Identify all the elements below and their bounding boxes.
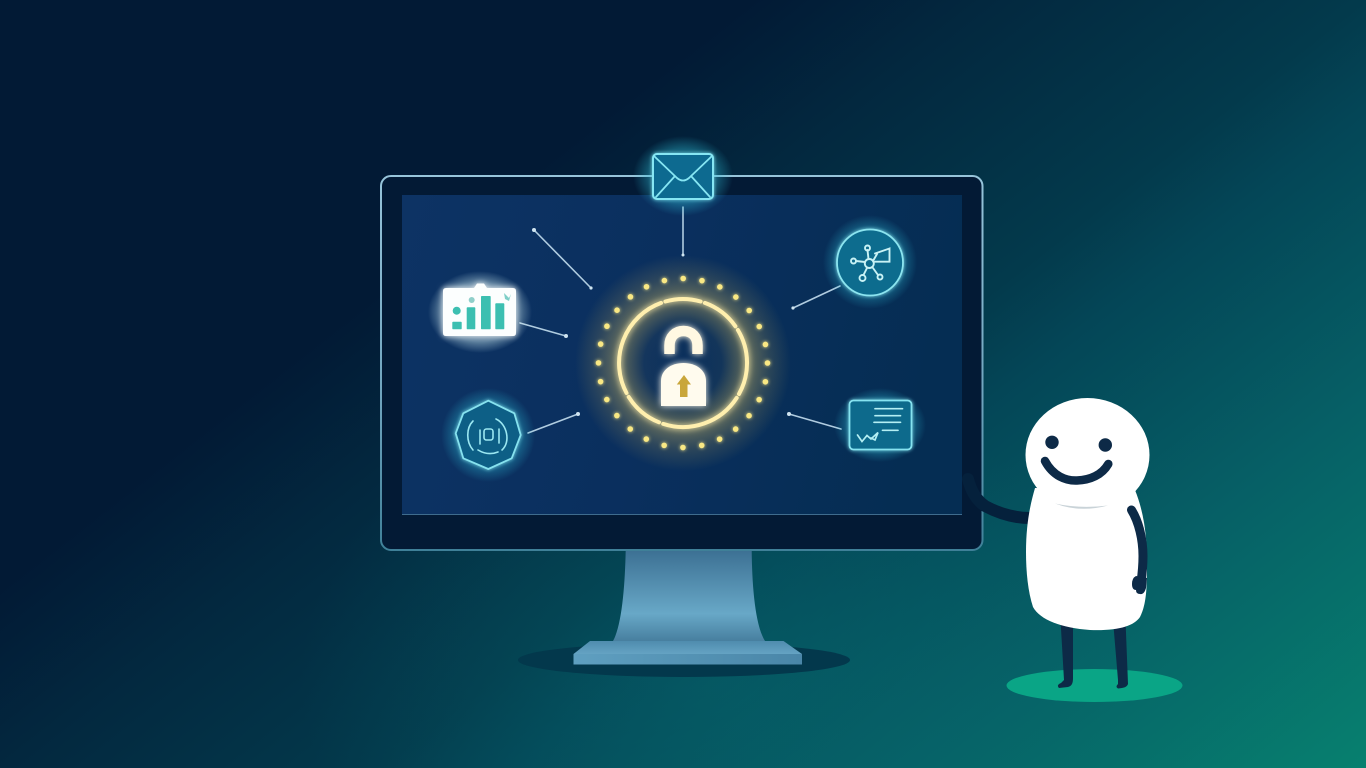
- network nodes: [851, 246, 890, 281]
- right arm: [1132, 510, 1143, 582]
- chin shadow: [1055, 504, 1108, 509]
- screen bottom edge: [402, 514, 962, 515]
- ring of dots: [598, 278, 768, 448]
- chart bars: [452, 293, 511, 329]
- stand base front: [574, 654, 802, 664]
- monitor: [381, 176, 982, 550]
- network glow: [823, 215, 917, 309]
- right eye: [1099, 438, 1112, 452]
- badge outline: [456, 401, 521, 469]
- icon: signed document: [834, 388, 926, 462]
- right hand: [1132, 576, 1147, 594]
- monitor bezel: [381, 176, 982, 550]
- emblem glow: [575, 255, 791, 471]
- padlock: [661, 331, 706, 406]
- signature: [858, 432, 878, 442]
- right leg: [1113, 620, 1128, 688]
- left eye: [1045, 436, 1059, 449]
- chart card glow: [428, 271, 532, 353]
- segmented ring: [619, 299, 747, 427]
- envelope glow: [633, 136, 733, 216]
- icon: chart card: [428, 271, 532, 353]
- network circle: [837, 230, 903, 296]
- body: [1026, 488, 1147, 630]
- monitor screen: [402, 195, 962, 515]
- document glow: [834, 388, 926, 462]
- central padlock emblem: [575, 255, 791, 471]
- smile: [1045, 461, 1108, 481]
- left leg: [1058, 620, 1073, 688]
- character ground ellipse: [1006, 669, 1182, 702]
- monitor stand: [574, 550, 802, 664]
- envelope outline: [653, 154, 713, 199]
- character: [968, 398, 1150, 688]
- head: [1026, 398, 1150, 512]
- pointing arm: [968, 479, 1030, 518]
- stand neck: [613, 550, 765, 641]
- connector lines: [520, 207, 841, 433]
- document text lines: [858, 409, 902, 442]
- badge glyph: [468, 419, 507, 454]
- upload arrow on lock: [677, 375, 691, 397]
- icon: octagon badge: [441, 388, 535, 482]
- monitor stand shadow: [518, 643, 850, 677]
- chart card: [443, 284, 516, 336]
- open shackle: [670, 331, 698, 354]
- envelope flap: [654, 156, 712, 197]
- icon: network badge: [823, 215, 917, 309]
- stand base top: [574, 641, 802, 654]
- lock body: [661, 363, 706, 406]
- icon: envelope: [633, 136, 733, 216]
- document outline: [850, 400, 912, 450]
- badge glow: [441, 388, 535, 482]
